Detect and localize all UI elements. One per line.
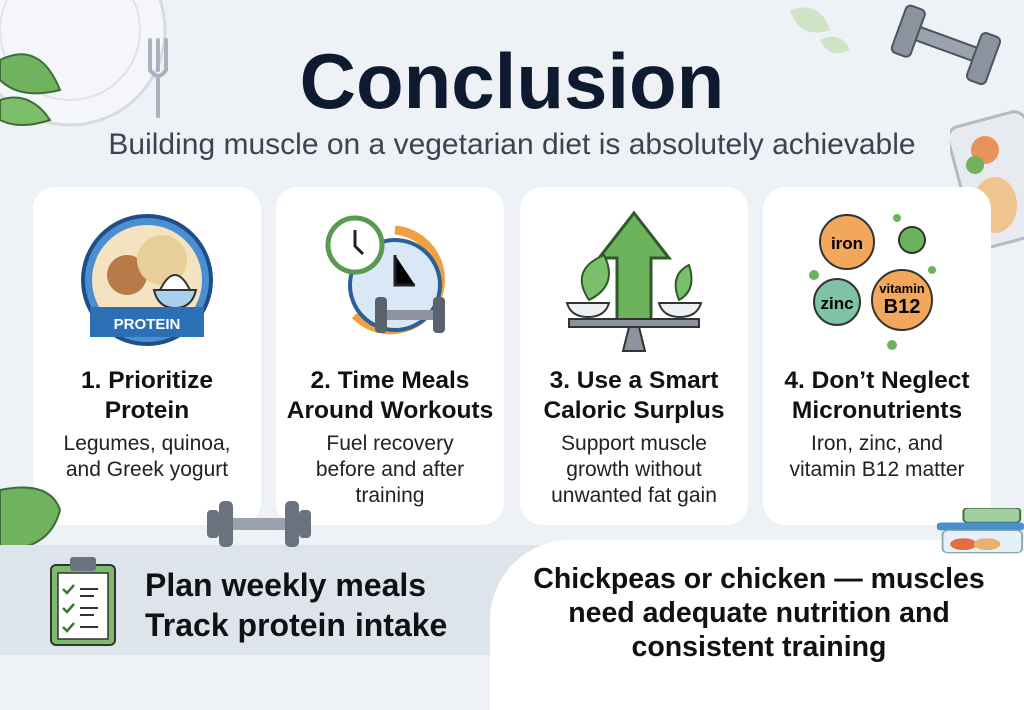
- card 1: prioritize protein: [33, 187, 261, 525]
- callout: chickpeas or chicken: need adequate nutrition and: [568, 597, 950, 629]
- decoration: meal prep container right: [950, 110, 1024, 248]
- icon: nutrient bubbles: iron: [831, 234, 863, 253]
- subtitle: Building muscle on a vegetarian diet is absolutely achievable: [108, 128, 916, 161]
- card 4: micronutrients: 4. Don’t Neglect: [784, 367, 970, 394]
- title: Conclusion: [300, 37, 724, 125]
- bottom band: plan: [0, 545, 540, 655]
- card 4: micronutrients: Micronutrients: [792, 397, 962, 424]
- card 3: caloric surplus: [520, 187, 748, 525]
- card 2: time meals: Around Workouts: [287, 397, 493, 424]
- icon: nutrient bubbles: zinc: [820, 294, 854, 313]
- icon: dumbbell: [207, 501, 311, 547]
- card 2: time meals: [276, 187, 504, 525]
- callout: chickpeas or chicken: Chickpeas or chicken — muscles: [533, 563, 985, 595]
- card 4: micronutrients: Iron, zinc, and: [811, 432, 943, 455]
- card 1: prioritize protein: and Greek yogurt: [66, 458, 228, 481]
- icon: nutrient bubbles: B12: [884, 296, 920, 318]
- text: plan weekly meals: Plan weekly meals: [145, 567, 426, 603]
- card 2: time meals: training: [356, 484, 424, 507]
- card 3: caloric surplus: 3. Use a Smart: [550, 367, 718, 394]
- card 3: caloric surplus: growth without: [566, 458, 702, 481]
- icon: nutrient bubbles: [809, 214, 936, 350]
- callout: chickpeas or chicken: [490, 540, 1024, 710]
- icon: arrow and scale: [566, 210, 702, 352]
- icon: clock and dumbbell: [326, 216, 445, 334]
- card 2: time meals: Fuel recovery: [326, 432, 454, 455]
- text: plan weekly meals: [145, 567, 447, 643]
- icon: protein bowl: PROTEIN: [114, 316, 180, 333]
- icon: protein bowl: [81, 214, 213, 346]
- card 2: time meals: 2. Time Meals: [311, 367, 469, 394]
- card 4: micronutrients: vitamin B12 matter: [789, 458, 965, 481]
- decoration: leaves bottom-left: [0, 486, 61, 545]
- decoration: food container bottom-right: [936, 508, 1024, 554]
- card 3: caloric surplus: unwanted fat gain: [551, 484, 717, 507]
- icon: nutrient bubbles: vitamin: [879, 281, 925, 296]
- card 2: time meals: before and after: [316, 458, 464, 481]
- decoration: plate and fork top-left: [0, 0, 168, 126]
- card 4: micronutrients: [763, 187, 991, 525]
- card 1: prioritize protein: Protein: [105, 397, 189, 424]
- decoration: dumbbell top-right: [790, 4, 1001, 86]
- text: plan weekly meals: Track protein intake: [145, 607, 447, 643]
- card 3: caloric surplus: Caloric Surplus: [543, 397, 725, 424]
- card 3: caloric surplus: Support muscle: [561, 432, 707, 455]
- card 1: prioritize protein: 1. Prioritize: [81, 367, 213, 394]
- card 1: prioritize protein: Legumes, quinoa,: [64, 432, 230, 455]
- callout: chickpeas or chicken: consistent training: [632, 631, 886, 663]
- icon: clipboard: [50, 557, 116, 646]
